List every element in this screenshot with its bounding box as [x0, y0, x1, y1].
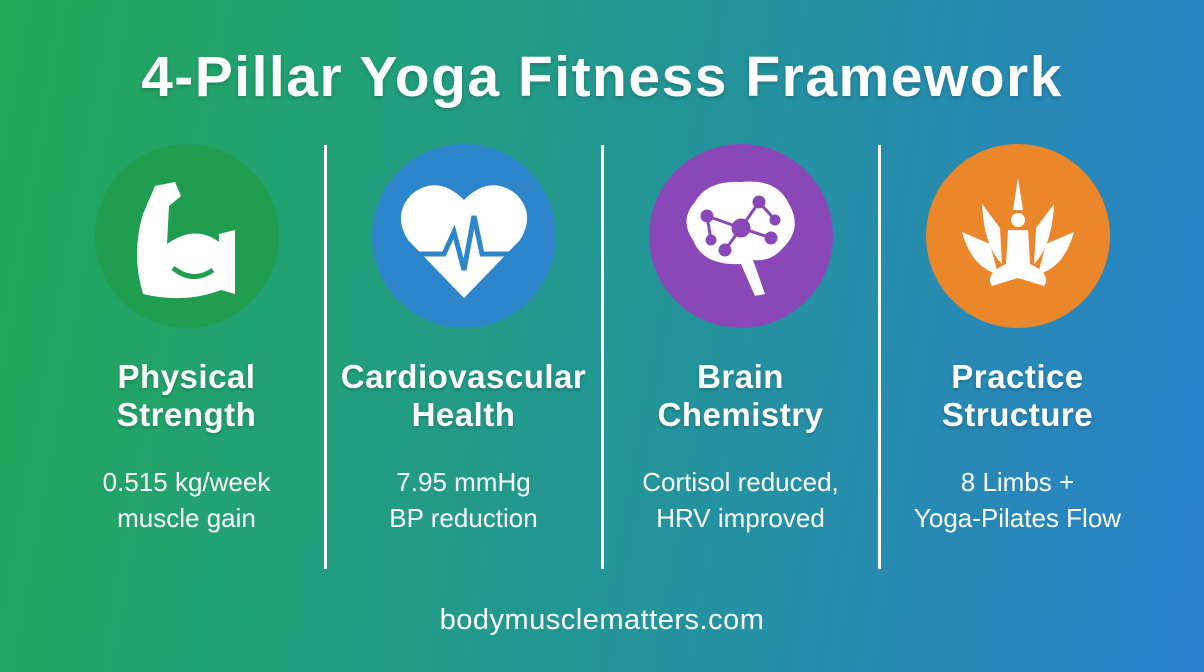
title: 4-Pillar Yoga Fitness Framework [141, 45, 1063, 109]
text: Yoga-Pilates Flow [914, 503, 1121, 533]
panel: brain [642, 144, 839, 533]
icon: brain [648, 144, 832, 328]
heading [341, 358, 586, 433]
text: 7.95 mmHg [396, 467, 531, 497]
text [914, 467, 1122, 533]
heading: Health [412, 396, 515, 433]
panel: practice [914, 144, 1122, 533]
text [103, 467, 270, 533]
heading [658, 358, 823, 436]
text [642, 467, 839, 533]
text: HRV improved [656, 503, 825, 533]
heading: Practice [951, 358, 1084, 395]
heading: Strength [117, 396, 256, 433]
text [389, 467, 538, 533]
heading: Structure [942, 396, 1093, 433]
heading: Brain [697, 358, 784, 395]
icon: flexed arm [94, 144, 278, 328]
text: 8 Limbs + [961, 467, 1074, 497]
heading: Chemistry [658, 396, 823, 433]
panel: physical strength [95, 144, 279, 533]
icon: heart [372, 144, 556, 328]
heading: Physical [118, 358, 255, 395]
panel: cardiovascular [341, 144, 586, 533]
heading [117, 358, 256, 436]
text: muscle gain [117, 503, 256, 533]
footer: bodymusclematters.com [440, 604, 764, 636]
text: Cortisol reduced, [642, 467, 839, 497]
heading [942, 358, 1093, 433]
heading: Cardiovascular [341, 358, 586, 395]
text: 0.515 kg/week [103, 467, 270, 497]
text: BP reduction [389, 503, 538, 533]
icon: lotus meditation [926, 144, 1110, 328]
